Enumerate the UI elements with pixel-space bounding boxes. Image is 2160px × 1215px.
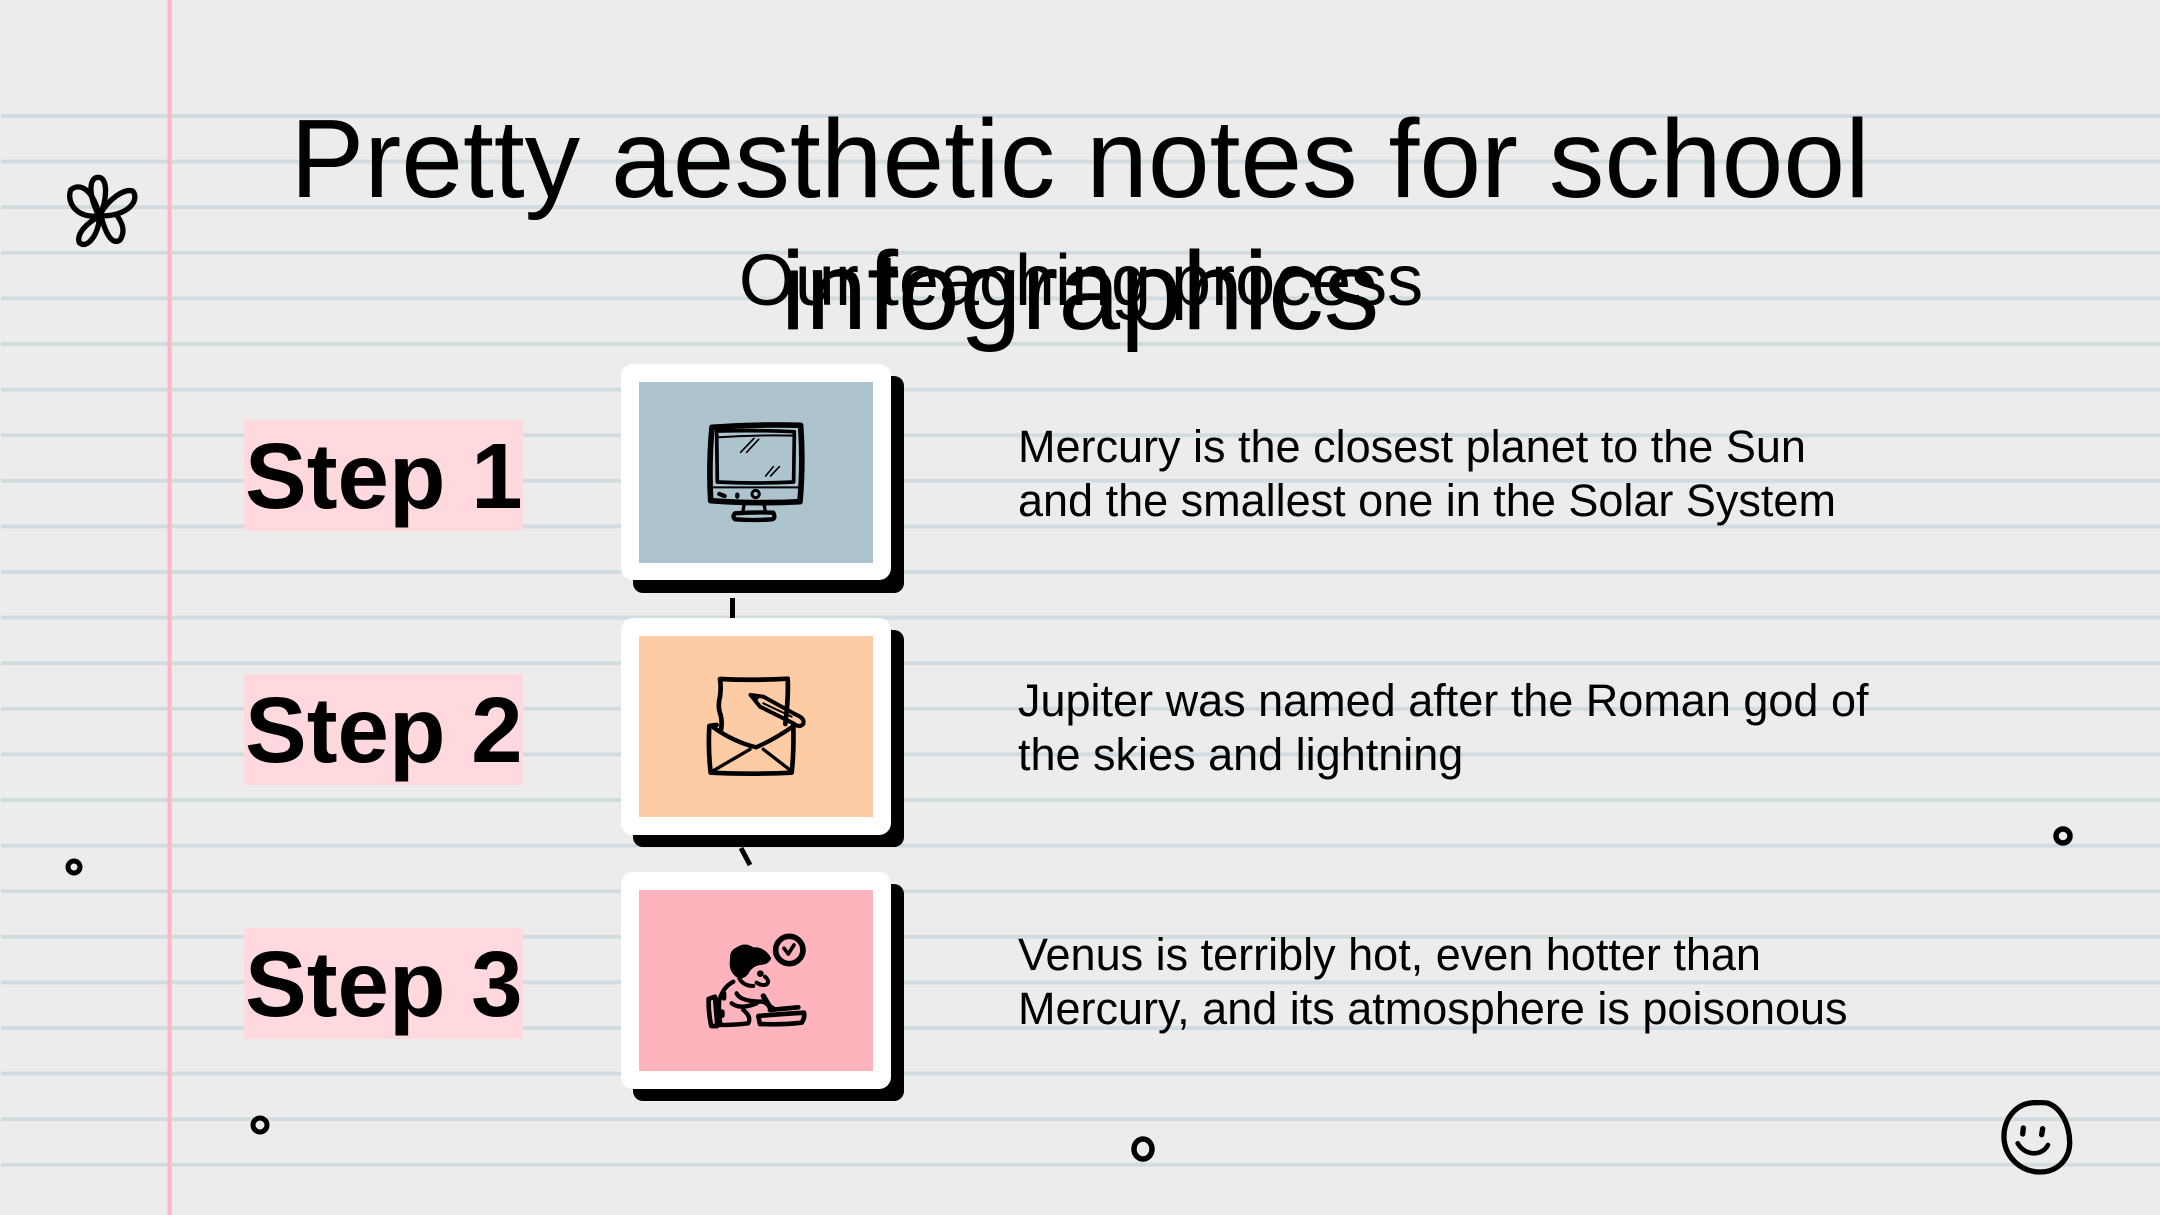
step 2 description: the skies and lightning bbox=[1018, 729, 1463, 780]
icon: computer monitor bbox=[710, 425, 802, 520]
panel: step 2 bbox=[244, 618, 1869, 847]
title: infographics bbox=[781, 229, 1379, 353]
panel: step 1 bbox=[244, 364, 1836, 593]
title: Pretty aesthetic notes for school bbox=[290, 97, 1870, 221]
icon: small circle doodle right bbox=[2056, 829, 2070, 843]
step 1 description: Mercury is the closest planet to the Sun bbox=[1018, 421, 1806, 472]
step 3 card bbox=[621, 872, 904, 1101]
connector: step 1 to step 2 bbox=[730, 598, 735, 618]
connector: step 2 to step 3 bbox=[741, 848, 750, 865]
step 1 card bbox=[621, 364, 904, 593]
step 3 label: Step 3 bbox=[245, 932, 523, 1036]
step 1 label: Step 1 bbox=[245, 424, 523, 528]
icon: envelope with pencil bbox=[709, 679, 804, 774]
step 2 label: Step 2 bbox=[245, 678, 523, 782]
step 2 card bbox=[621, 618, 904, 847]
icon: small circle doodle bottom centre bbox=[1134, 1139, 1152, 1159]
panel: step 3 bbox=[244, 872, 1848, 1101]
subtitle: Our teaching process bbox=[739, 241, 1423, 321]
step 2 description: Jupiter was named after the Roman god of bbox=[1018, 675, 1868, 726]
step 1 description: and the smallest one in the Solar System bbox=[1018, 475, 1836, 526]
icon: small circle doodle left bbox=[68, 861, 80, 873]
step 3 description: Venus is terribly hot, even hotter than bbox=[1018, 929, 1761, 980]
icon: small circle doodle bottom left bbox=[253, 1118, 267, 1132]
step 3 description: Mercury, and its atmosphere is poisonous bbox=[1018, 983, 1848, 1034]
icon: smiley face bbox=[2004, 1103, 2070, 1172]
icon: person studying at desk bbox=[709, 936, 804, 1026]
icon: flower doodle bbox=[70, 177, 135, 244]
